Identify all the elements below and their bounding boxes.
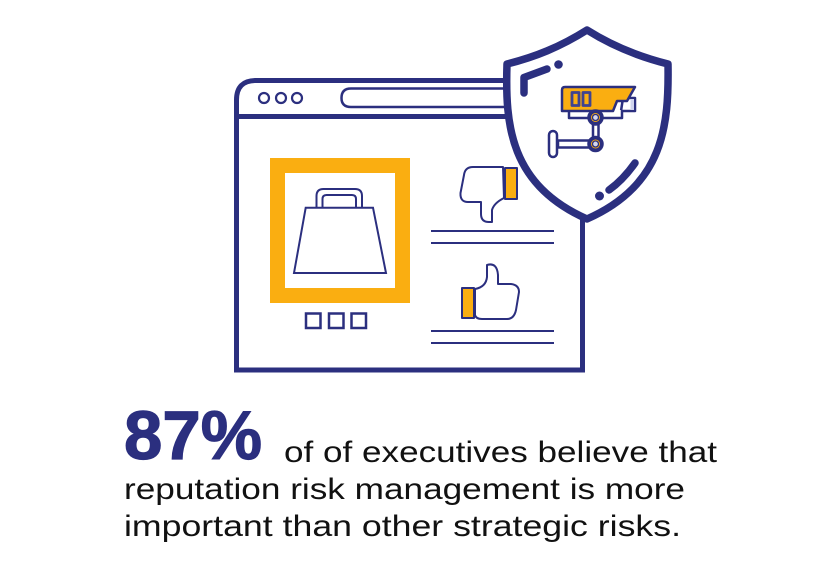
browser window (234, 80, 582, 372)
description text: of of executives believe that (284, 436, 718, 469)
camera wall plate (549, 131, 557, 157)
gallery thumbnails (306, 314, 366, 328)
big number: 87% (124, 397, 262, 474)
security shield (507, 30, 668, 219)
icon: shopping bag (294, 189, 386, 273)
description text: important than other strategic risks. (124, 510, 681, 543)
camera joints (588, 110, 602, 124)
window control dots (259, 93, 302, 103)
camera arm (558, 124, 598, 148)
description text (124, 436, 718, 543)
statistic text (124, 397, 718, 543)
icon: security camera (549, 87, 635, 157)
icon: thumbs up (462, 264, 519, 319)
camera mount bracket (569, 110, 622, 118)
description text: reputation risk management is more (124, 473, 685, 506)
review lines bottom (431, 331, 554, 343)
shield highlight top (524, 60, 563, 93)
orange frame (278, 166, 402, 296)
shield highlight bottom (595, 163, 635, 200)
camera body (562, 87, 635, 111)
browser header divider (236, 114, 520, 119)
browser frame (234, 80, 582, 372)
camera rear housing (621, 98, 635, 111)
address bar (342, 88, 520, 107)
camera lens marks (572, 92, 579, 106)
product image frame (278, 166, 402, 328)
icon: thumbs down (460, 167, 517, 222)
shield outline (507, 30, 668, 219)
review lines top (431, 231, 554, 243)
